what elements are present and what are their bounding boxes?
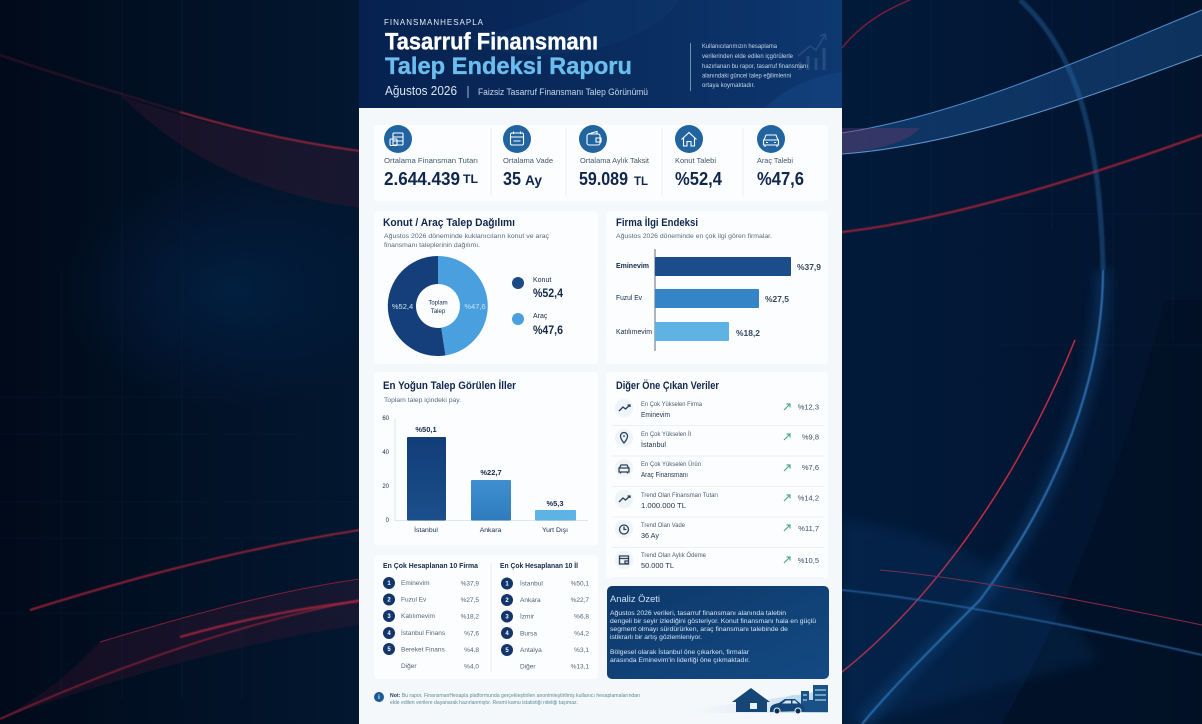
description: Ağustos 2026 döneminde kuklanıcıların konut ve araç: [384, 233, 550, 240]
row: top rising company: En Çok Yükselen Firma: [641, 402, 703, 408]
row: top rising company: %12,3: [798, 402, 819, 412]
table: top provinces: %50,1: [571, 580, 589, 588]
header banner: [359, 0, 842, 108]
horizontal bar chart: [616, 249, 821, 351]
KPI: average term: [503, 125, 553, 189]
KPI: average monthly payment: TL: [634, 174, 648, 188]
row: trending monthly payment: [615, 551, 819, 570]
callout: analysis summary: Ağustos 2026 verileri, tasarruf finansmanı alanında talebin: [610, 610, 786, 617]
icon: trend: [619, 405, 630, 411]
table: top companies: %7,6: [464, 630, 479, 638]
table: top provinces: [500, 561, 589, 670]
heading: Konut / Araç Talep Dağılımı: [383, 217, 515, 229]
table: top provinces: %22,7: [571, 597, 589, 604]
horizontal bar chart: Fuzul Ev: [616, 295, 642, 302]
icon: car: [619, 465, 629, 474]
table: top companies: %4,0: [464, 664, 479, 670]
title line 2: Talep Endeksi Raporu: [385, 53, 632, 80]
description: finansmanı taleplerinin dağılımı.: [384, 242, 480, 249]
row: trending monthly payment: 50.000 TL: [641, 563, 674, 570]
table: top companies: [383, 561, 479, 670]
column chart: [382, 416, 588, 534]
row: top rising province: En Çok Yükselen İl: [641, 431, 691, 438]
KPI: housing demand: %52,4: [675, 169, 722, 189]
donut chart: %52,4: [392, 302, 413, 311]
title line 1: Tasarruf Finansmanı: [385, 28, 598, 56]
row: trending term: [615, 520, 819, 540]
KPI: average term: 35: [503, 169, 521, 189]
background: right side: [842, 0, 1202, 724]
table: top companies: %4,8: [464, 647, 479, 654]
table: top provinces: İzmir: [520, 612, 535, 620]
table: top provinces: 4: [505, 631, 509, 637]
icon: info: i: [378, 695, 380, 701]
icon: calendar: [510, 132, 524, 145]
KPI: average term: Ortalama Vade: [503, 156, 553, 165]
table: top provinces: %3,1: [574, 647, 589, 654]
callout: analysis summary: arasında Eminevim'in liderliği öne çıkmaktadır.: [610, 657, 750, 664]
header description: ortaya koymaktadır.: [702, 83, 755, 89]
KPI strip: [374, 125, 828, 201]
table: top companies: 4: [387, 631, 391, 637]
subtitle: Faizsiz Tasarruf Finansmanı Talep Görünümü: [478, 87, 648, 97]
date: Ağustos 2026: [385, 83, 457, 98]
KPI: average financing amount: TL: [463, 172, 478, 186]
heading: Diğer Öne Çıkan Veriler: [616, 379, 720, 392]
legend: %47,6: [533, 323, 563, 337]
table: top provinces: Ankara: [520, 597, 541, 604]
horizontal bar chart: %18,2: [736, 328, 760, 338]
footnote: [374, 692, 640, 706]
column chart: 60: [382, 416, 390, 422]
callout: analysis summary: dengeli bir seyir izlediğini gösteriyor. Konut finansmanı hala en güçlü: [610, 618, 816, 625]
icon: clock: [620, 525, 628, 534]
horizontal bar chart: Katılımevim: [616, 329, 652, 336]
KPI: average monthly payment: Ortalama Aylık Taksit: [580, 156, 650, 165]
table: top provinces: 5: [505, 648, 509, 654]
legend: Konut: [533, 277, 551, 284]
row: top rising product: %7,6: [802, 463, 819, 472]
header description: Kullanıcılarımızın hesaplama: [702, 44, 778, 50]
table: top companies: %27,5: [461, 597, 479, 604]
table: top provinces: Bursa: [520, 630, 537, 638]
KPI: average financing amount: [384, 125, 478, 189]
KPI: average monthly payment: [579, 125, 650, 189]
row: top rising company: Eminevim: [641, 412, 670, 419]
icon: info: [374, 692, 384, 702]
footnote: elde edilen verilere dayanarak hazırlanmıştır. Resmi kamu istatistiği niteliği taşımaz.: [390, 700, 578, 706]
column chart: 20: [382, 484, 390, 490]
table: top provinces: Antalya: [520, 647, 542, 654]
callout: analysis summary: istikrarlı bir artış gözlemleniyor.: [610, 634, 702, 641]
row: top rising product: Araç Finansmanı: [641, 472, 688, 479]
icon: car: [764, 135, 778, 147]
row: trending term: %11,7: [798, 524, 819, 533]
table: top companies: 2: [387, 598, 391, 604]
KPI: average financing amount: Ortalama Finansman Tutarı: [384, 156, 478, 165]
icon: wallet: [587, 132, 601, 145]
header description: [702, 44, 808, 89]
heading: En Yoğun Talep Görülen İller: [383, 379, 517, 392]
table: top provinces: Diğer: [520, 664, 536, 670]
icon: buildings: [801, 685, 828, 712]
column chart: %5,3: [546, 499, 564, 508]
table: top companies: Bereket Finans: [401, 646, 445, 654]
panel: company interest index: [606, 211, 828, 364]
icon: car: [770, 699, 805, 714]
table: top provinces: En Çok Hesaplanan 10 İl: [500, 561, 578, 570]
table: top provinces: 1: [505, 582, 509, 588]
row: trending amount: %14,2: [798, 494, 819, 502]
column chart: %50,1: [415, 425, 437, 434]
icon: trend: [619, 496, 630, 502]
callout: analysis summary: [607, 586, 829, 679]
panel: housing / vehicle demand distribution: [374, 211, 598, 364]
icon: house: [682, 132, 696, 146]
callout: analysis summary: segment olmayı sürdürürken, araç finansmanı talebinde de: [610, 626, 788, 633]
column chart: Yurt Dışı: [542, 527, 568, 534]
description: [384, 233, 550, 249]
callout: analysis summary: Bölgesel olarak İstanbul öne çıkarken, firmalar: [610, 647, 750, 656]
panel: top provinces: [374, 372, 598, 545]
table: top companies: 1: [387, 581, 391, 587]
table: top companies: 5: [387, 647, 391, 653]
column chart: 0: [386, 518, 390, 524]
KPI: vehicle demand: Araç Talebi: [757, 156, 793, 165]
KPI: average financing amount: 2.644.439: [384, 169, 460, 189]
illustration: house, car and city: [680, 685, 828, 714]
donut chart: Talep: [431, 309, 446, 315]
callout: analysis summary: Analiz Özeti: [610, 594, 660, 604]
table: top companies: %18,2: [461, 614, 479, 620]
table: top companies: Diğer: [401, 663, 417, 670]
row: trending amount: Trend Olan Finansman Tutarı: [641, 493, 718, 499]
table: top provinces: 2: [505, 598, 509, 604]
KPI: vehicle demand: [757, 125, 804, 189]
header description: verilerinden elde edilen içgörülerle: [702, 54, 794, 60]
table: top companies: İstanbul Finans: [401, 628, 446, 637]
table: top provinces: 3: [505, 614, 509, 620]
column chart: İstanbul: [414, 525, 438, 534]
heading: Firma İlgi Endeksi: [616, 216, 698, 229]
icon: payment card: [620, 556, 628, 564]
horizontal bar chart: %37,9: [797, 262, 821, 272]
row: top rising province: %9,8: [802, 432, 819, 442]
description: Ağustos 2026 döneminde en çok ilgi gören firmalar.: [616, 233, 772, 240]
footnote: Not: Bu rapor, FinansmanHesapla platformunda gerçekleştirilen anonimleştirilmiş kullanıcı hesaplamalarından: [390, 693, 640, 699]
legend: Araç: [533, 313, 548, 320]
panel: other highlights: [606, 372, 828, 579]
table: top provinces: %4,2: [574, 630, 589, 638]
KPI: average monthly payment: 59.089: [579, 169, 628, 189]
table: top companies: Katılımevim: [401, 613, 435, 620]
icon: coins: [390, 133, 403, 146]
row: trending amount: [615, 490, 819, 510]
column chart: 40: [382, 450, 390, 456]
table: top companies: Eminevim: [401, 580, 430, 587]
row: top rising province: [615, 429, 819, 449]
icon: house: [732, 688, 770, 712]
table: top provinces: %6,8: [574, 614, 589, 620]
horizontal bar chart: Eminevim: [616, 263, 649, 270]
legend: [512, 277, 563, 337]
table: top provinces: İstanbul: [520, 578, 543, 588]
table: top companies: %37,9: [461, 580, 479, 588]
table: top companies: Fuzul Ev: [401, 596, 427, 604]
legend: %52,4: [533, 286, 563, 300]
row: top rising product: [615, 459, 819, 479]
background: left side: [0, 0, 400, 724]
report page: [359, 0, 842, 724]
row: trending amount: 1.000.000 TL: [641, 503, 686, 510]
table: top companies: 3: [387, 614, 391, 620]
row: top rising product: En Çok Yükselen Ürün: [641, 461, 701, 468]
row: trending term: 36 Ay: [641, 533, 660, 540]
donut chart: %47,6: [464, 302, 486, 311]
panel: top 10 tables: [374, 555, 598, 679]
header description: alanındaki güncel talep eğilimlerini: [702, 74, 791, 80]
horizontal bar chart: %27,5: [765, 294, 789, 304]
row: trending term: Trend Olan Vade: [641, 523, 686, 529]
KPI: average term: Ay: [525, 172, 542, 188]
description: Toplam talep içindeki pay.: [384, 397, 461, 404]
donut chart: Toplam: [428, 300, 448, 306]
table: top companies: En Çok Hesaplanan 10 Firma: [383, 561, 479, 570]
header description: hazırlanan bu rapor, tasarruf finansmanı: [702, 64, 808, 70]
brand label: FINANSMANHESAPLA: [384, 18, 484, 27]
row: trending monthly payment: Trend Olan Aylık Ödeme: [641, 552, 707, 559]
KPI: housing demand: Konut Talebi: [675, 156, 716, 165]
table: top provinces: %13,1: [571, 664, 589, 670]
column chart: %22,7: [480, 468, 502, 477]
KPI: vehicle demand: %47,6: [757, 169, 804, 189]
row: top rising province: İstanbul: [641, 440, 666, 449]
row: trending monthly payment: %10,5: [798, 556, 819, 565]
icon: faint growth chart: [798, 34, 826, 70]
column chart: Ankara: [480, 527, 501, 534]
row: top rising company: [615, 399, 819, 419]
KPI: housing demand: [675, 125, 722, 189]
donut chart: [388, 256, 488, 356]
icon: location pin: [620, 433, 628, 443]
